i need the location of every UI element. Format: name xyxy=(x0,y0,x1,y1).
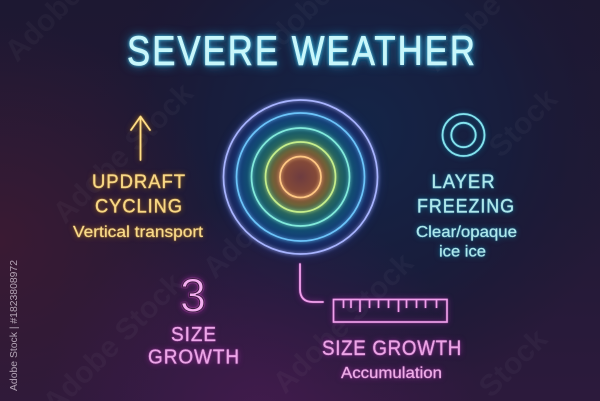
rings xyxy=(224,100,378,254)
panel: layer freezing xyxy=(382,114,517,260)
number 3: 3 xyxy=(180,268,206,322)
heading: layer freezing xyxy=(417,172,515,218)
text: clear/opaque ice: ice ice xyxy=(439,244,486,260)
icon: double ring xyxy=(442,114,484,156)
heading: updraft cycling: CYCLING xyxy=(95,196,183,218)
side credit text: Adobe Stock | #1823808972 xyxy=(9,260,20,391)
panel: size growth number xyxy=(148,268,240,368)
text: clear/opaque ice: Clear/opaque xyxy=(416,224,517,241)
heading: size growth: SIZE GROWTH xyxy=(322,337,462,360)
heading: size growth left: GROWTH xyxy=(148,346,240,368)
heading: layer freezing: FREEZING xyxy=(417,196,515,218)
text: vertical transport: Vertical transport xyxy=(73,224,204,241)
heading: updraft cycling: UPDRAFT xyxy=(92,172,186,193)
ring halo xyxy=(222,98,380,256)
ring disc fill xyxy=(224,100,378,254)
heading: layer freezing: LAYER xyxy=(432,172,496,193)
icon: ruler xyxy=(334,300,447,322)
watermarks: Adobe Stock xyxy=(267,247,420,400)
watermarks: Stock xyxy=(483,83,564,164)
text: clear/opaque ice xyxy=(416,224,517,260)
heading: size growth left xyxy=(148,324,240,368)
icon: up arrow xyxy=(131,116,150,160)
title: SEVERE WEATHER xyxy=(127,27,477,74)
panel: size growth ruler xyxy=(300,264,462,382)
connector elbow xyxy=(300,264,323,302)
heading: size growth left: SIZE xyxy=(171,324,217,346)
panel: updraft cycling xyxy=(73,116,204,241)
watermarks: Adobe Stock xyxy=(197,132,350,285)
watermarks: Adobe Stock xyxy=(47,77,200,230)
heading: updraft cycling xyxy=(92,172,186,218)
connector line xyxy=(382,177,419,179)
text: accumulation: Accumulation xyxy=(341,365,442,382)
panel: concentric hailstone rings xyxy=(222,98,380,256)
